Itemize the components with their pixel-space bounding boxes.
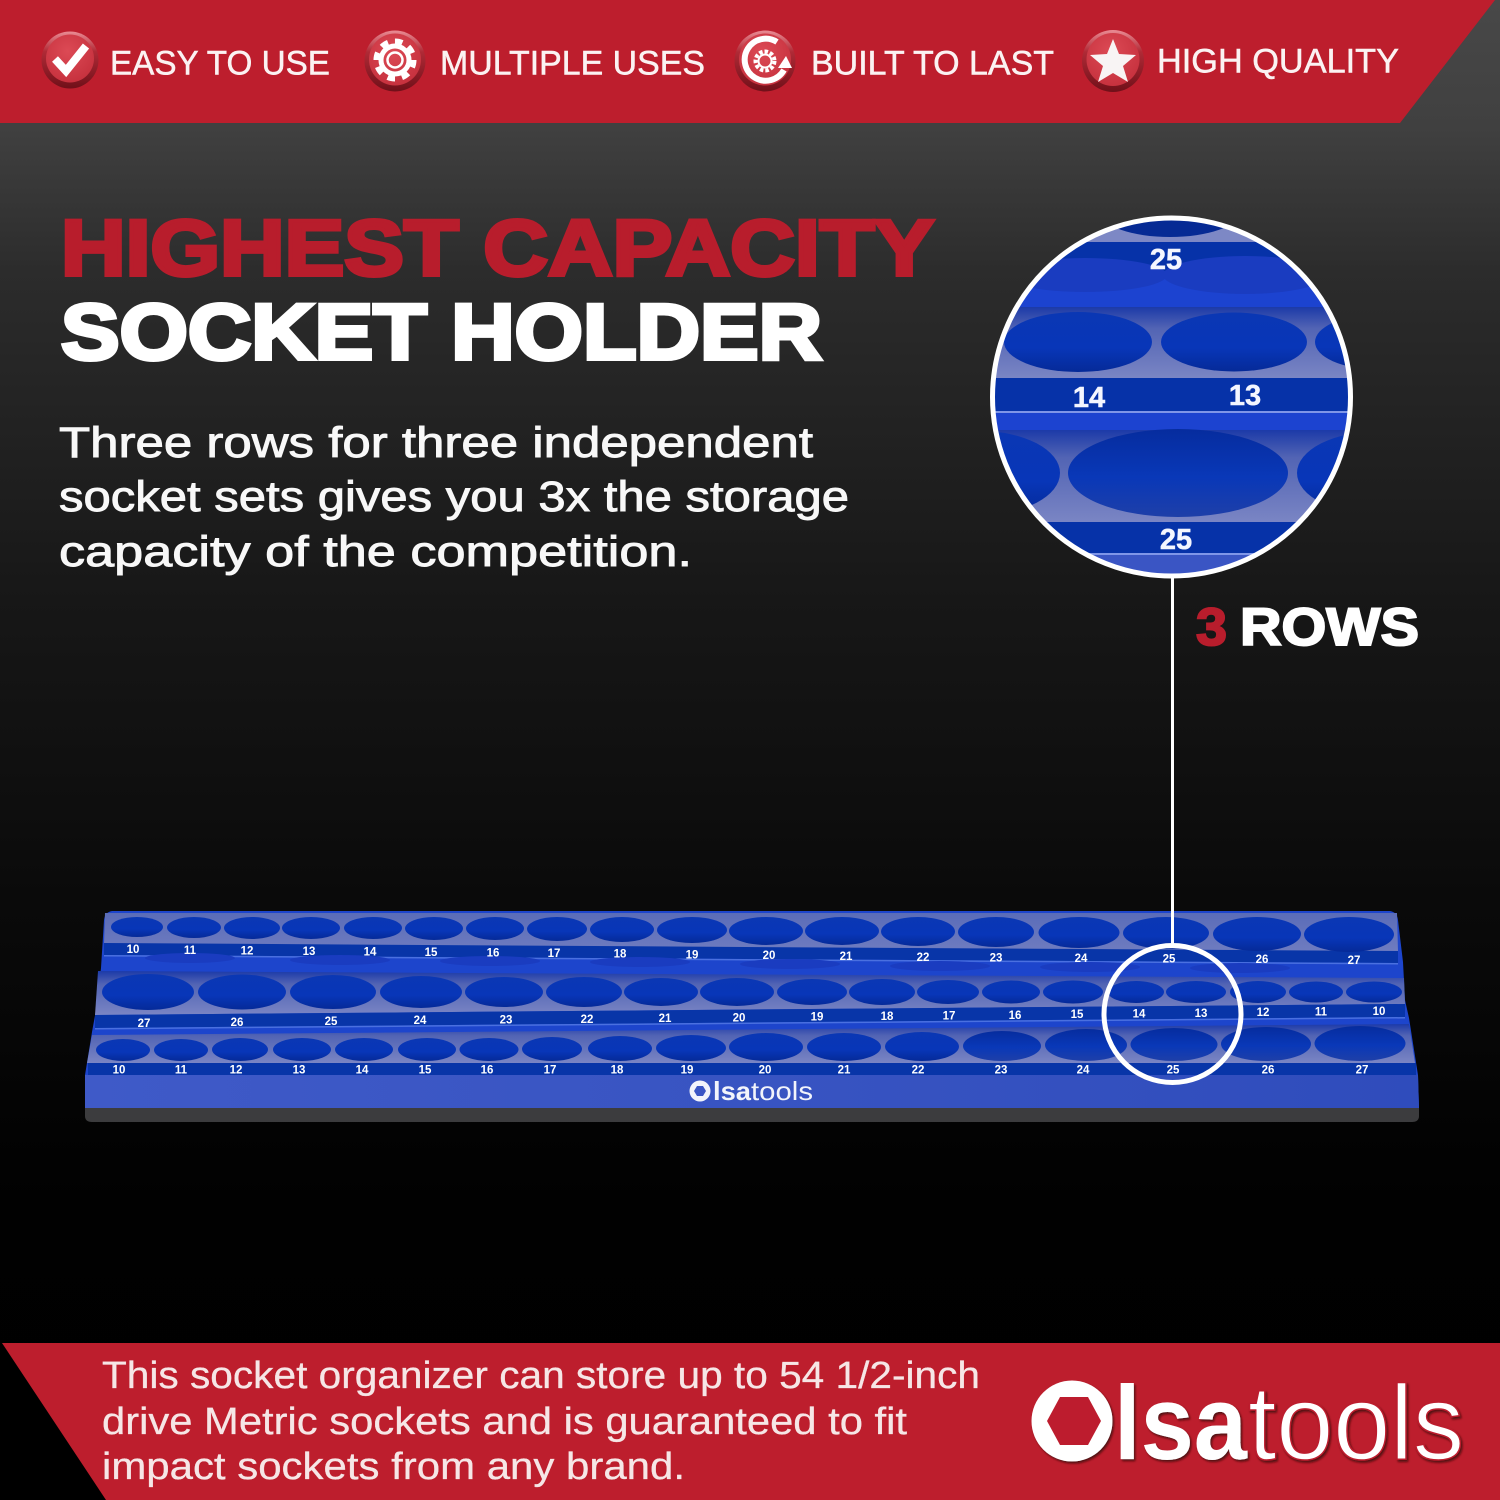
top row size labels: 18 [614, 948, 627, 960]
middle row size labels: 24 [414, 1015, 427, 1027]
feature: easy to use: EASY TO USE [110, 44, 330, 82]
bottom row size labels: 10 [113, 1064, 125, 1076]
middle row size labels: 20 [733, 1012, 745, 1024]
footer text: impact sockets from any brand. [102, 1446, 685, 1488]
feature: easy to use [42, 32, 330, 88]
footer text: This socket organizer can store up to 54 1/2-inch [102, 1355, 980, 1397]
top row size labels: 21 [840, 951, 853, 963]
middle row size labels: 16 [1009, 1010, 1021, 1022]
bottom row size labels: 22 [912, 1064, 924, 1076]
description text: capacity of the competition. [59, 528, 692, 576]
magnified detail circle: 25 [1150, 244, 1182, 276]
footer text: drive Metric sockets and is guaranteed to fit [102, 1401, 907, 1443]
bottom banner [2, 1343, 1500, 1500]
groove reflections [145, 953, 1290, 973]
connector line [1171, 578, 1174, 944]
middle row size labels: 12 [1257, 1007, 1269, 1019]
middle row size labels: 27 [138, 1018, 150, 1030]
top row size labels: 19 [686, 950, 698, 962]
bottom row size labels: 26 [1262, 1064, 1274, 1076]
middle row size labels: 26 [231, 1017, 243, 1029]
top row size labels: 20 [763, 950, 775, 962]
middle row size labels: 18 [881, 1011, 894, 1023]
bottom row size labels: 20 [759, 1064, 771, 1076]
callout: 3 rows: 3 [1196, 598, 1227, 657]
middle row size labels [138, 1006, 1385, 1030]
magnified detail circle: 13 [1229, 380, 1261, 412]
middle row size labels: 14 [1133, 1008, 1146, 1020]
callout: 3 rows: ROWS [1240, 598, 1419, 657]
middle row size labels: 17 [943, 1010, 955, 1022]
middle row size labels: 23 [500, 1014, 512, 1026]
magnified detail circle [990, 216, 1353, 578]
middle row size labels: 11 [1315, 1006, 1328, 1018]
tray body [85, 911, 1419, 1108]
bottom row size labels: 23 [995, 1064, 1007, 1076]
bottom row size labels: 14 [356, 1064, 369, 1076]
bottom row size labels [113, 1064, 1368, 1076]
top row size labels [127, 944, 1360, 967]
top row size labels: 23 [990, 952, 1002, 964]
top row size labels: 16 [487, 948, 499, 960]
bottom row size labels: 11 [175, 1064, 188, 1076]
top row size labels: 15 [425, 947, 438, 959]
top row size labels: 12 [241, 946, 253, 958]
bottom row size labels: 16 [481, 1064, 493, 1076]
middle row size labels: 22 [581, 1014, 593, 1026]
middle row size labels: 15 [1071, 1009, 1084, 1021]
top row size labels: 13 [303, 946, 315, 958]
top row size labels: 27 [1348, 955, 1360, 967]
top row size labels: 24 [1075, 953, 1088, 965]
title: HIGHEST CAPACITY [61, 203, 934, 292]
detail ring on tray [1104, 946, 1241, 1082]
description text: socket sets gives you 3x the storage [59, 473, 849, 521]
top row size labels: 25 [1163, 954, 1176, 966]
feature: built to last: BUILT TO LAST [811, 44, 1054, 82]
top row size labels: 17 [548, 948, 560, 960]
top row size labels: 10 [127, 944, 139, 956]
top banner [0, 0, 1495, 123]
bottom row size labels: 27 [1356, 1064, 1368, 1076]
tray logo: tools [751, 1076, 813, 1106]
middle row size labels: 10 [1373, 1006, 1385, 1018]
top row sockets [111, 917, 1394, 952]
top row size labels: 22 [917, 952, 929, 964]
bottom row size labels: 15 [419, 1064, 432, 1076]
brand logo: lsa [1114, 1365, 1248, 1482]
brand logo: tools [1248, 1364, 1464, 1482]
description text: Three rows for three independent [59, 419, 813, 467]
bottom row size labels: 13 [293, 1064, 305, 1076]
brand logo [1032, 1364, 1464, 1482]
bottom row size labels: 25 [1167, 1064, 1180, 1076]
feature: high quality: HIGH QUALITY [1157, 42, 1399, 80]
bottom row size labels: 21 [838, 1064, 851, 1076]
footer text [102, 1355, 980, 1488]
brand logo: O [1034, 1364, 1110, 1481]
top row size labels: 11 [184, 945, 197, 957]
description text [59, 419, 849, 576]
magnified detail circle: 25 [1160, 524, 1192, 556]
bottom row size labels: 17 [544, 1064, 556, 1076]
bottom row size labels: 19 [681, 1064, 693, 1076]
middle row size labels: 25 [325, 1016, 338, 1028]
top row size labels: 14 [364, 946, 377, 958]
bottom row size labels: 12 [230, 1064, 242, 1076]
middle row size labels: 21 [659, 1013, 672, 1025]
feature: multiple uses: MULTIPLE USES [440, 44, 705, 82]
feature: high quality [1082, 30, 1399, 92]
feature: built to last [734, 30, 1054, 92]
title: SOCKET HOLDER [61, 287, 822, 376]
feature: multiple uses [364, 30, 705, 92]
top row size labels: 26 [1256, 954, 1268, 966]
socket tray [85, 911, 1419, 1122]
tray base [85, 1106, 1419, 1122]
magnified detail circle: 14 [1073, 382, 1105, 414]
bottom row size labels: 24 [1077, 1064, 1090, 1076]
bottom row sockets [96, 1026, 1406, 1061]
bottom row size labels: 18 [611, 1064, 624, 1076]
tray logo: lsa [713, 1076, 752, 1106]
tray logo [690, 1076, 813, 1106]
middle row size labels: 19 [811, 1012, 823, 1024]
tray logo: O [690, 1076, 710, 1106]
middle row sockets [102, 974, 1402, 1010]
middle row size labels: 13 [1195, 1008, 1207, 1020]
title [61, 203, 934, 376]
